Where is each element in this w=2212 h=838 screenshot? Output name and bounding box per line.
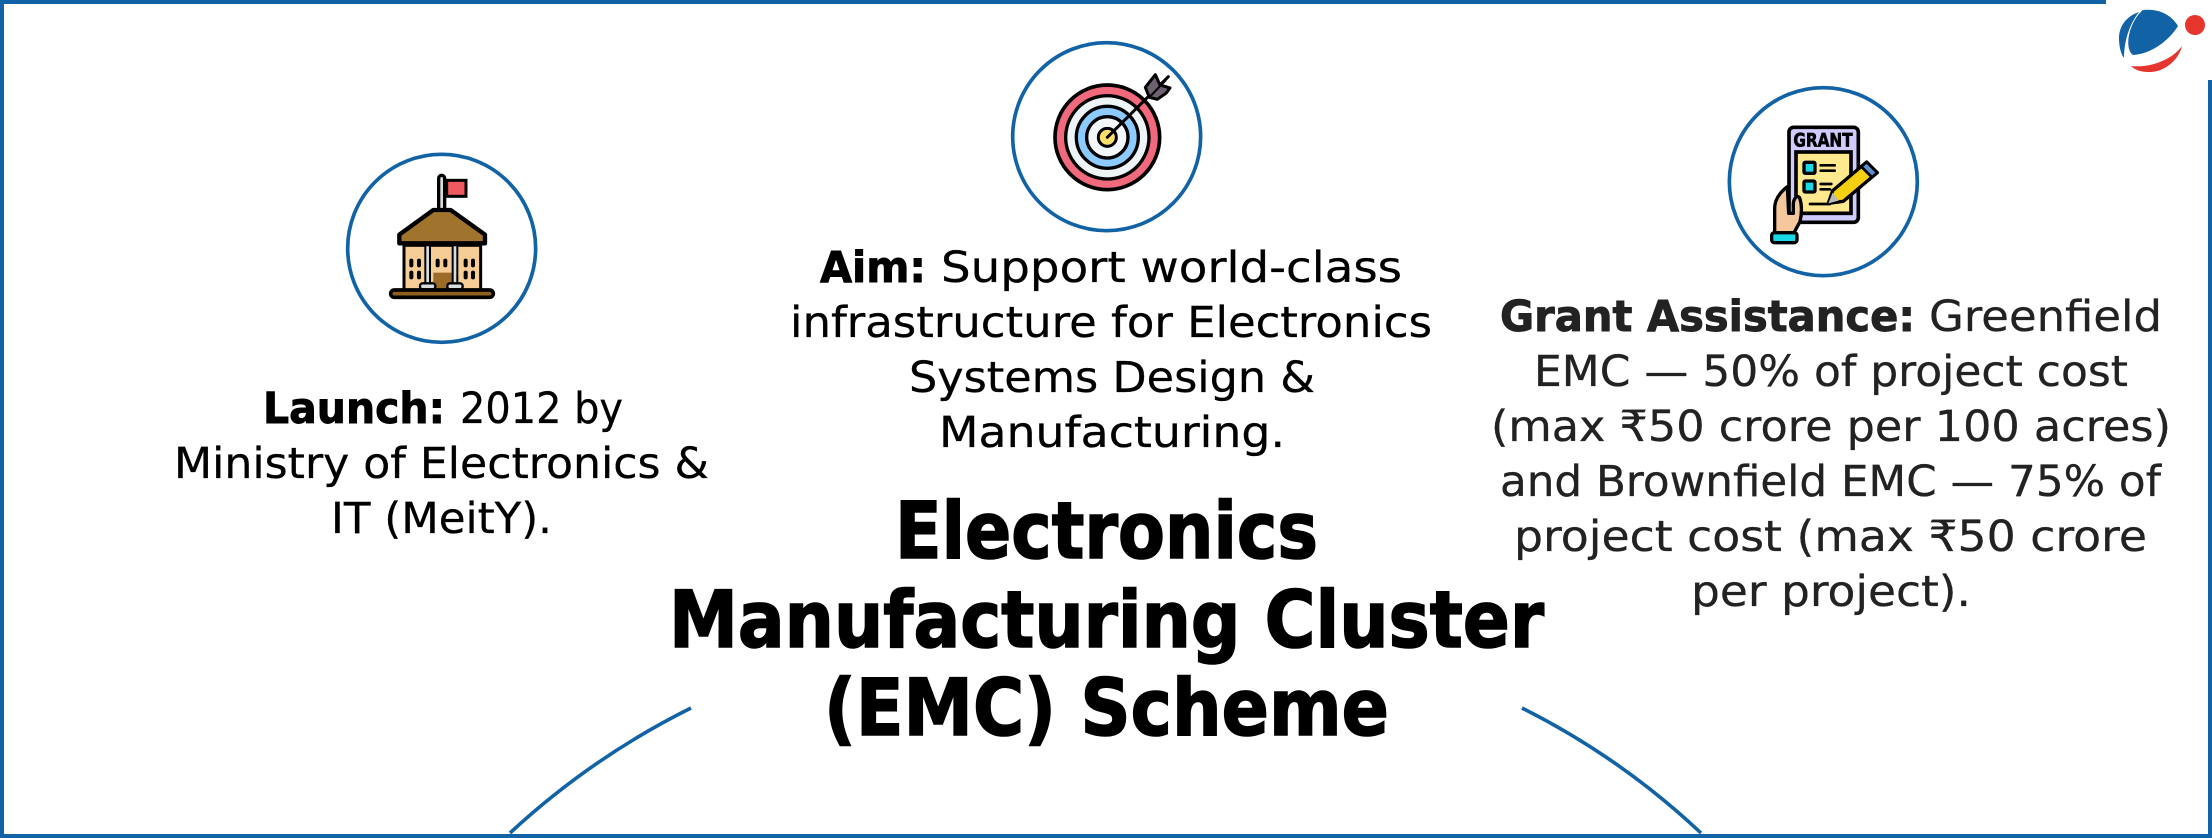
logo [2119,10,2205,72]
text: grant assistance: Grant Assistance: [1500,292,1915,342]
text: aim: infrastructure for Electronics [790,298,1432,348]
text: aim [790,243,1432,458]
text: grant assistance: per project). [1691,567,1971,617]
text: aim: Manufacturing. [939,408,1285,458]
text: launch: Launch: [263,384,445,434]
text: grant assistance: EMC — 50% of project cost [1534,347,2128,397]
text: grant assistance [1491,292,2171,617]
left arc [510,708,691,833]
text: grant assistance: and Brownfield EMC — 75% of [1500,457,2162,507]
text: grant assistance: project cost (max ₹50 crore [1514,512,2147,562]
title: (EMC) Scheme [824,664,1389,754]
text: launch: 2012 by [460,384,623,434]
text: grant assistance: (max ₹50 crore per 100 acres) [1491,402,2171,452]
text: launch [174,384,709,544]
text: grant assistance: Greenfield [1929,292,2162,342]
text: aim: Systems Design & [909,353,1315,403]
panel: launch [174,154,709,544]
panel: aim [790,43,1432,458]
text: aim: Support world-class [941,243,1402,293]
panel: grant assistance [1491,88,2171,617]
icon: government building [348,154,536,342]
right arc [1522,708,1701,833]
title [669,487,1544,754]
icon: grant form with pencil: GRANT [1793,131,1853,152]
title: Manufacturing Cluster [669,576,1544,666]
text: launch: IT (MeitY). [331,494,552,544]
text: launch: Ministry of Electronics & [174,439,709,489]
title: Electronics [895,487,1318,577]
text: aim: Aim: [820,243,926,293]
icon: target with arrow [1013,43,1201,231]
icon: grant form with pencil [1729,88,1917,276]
